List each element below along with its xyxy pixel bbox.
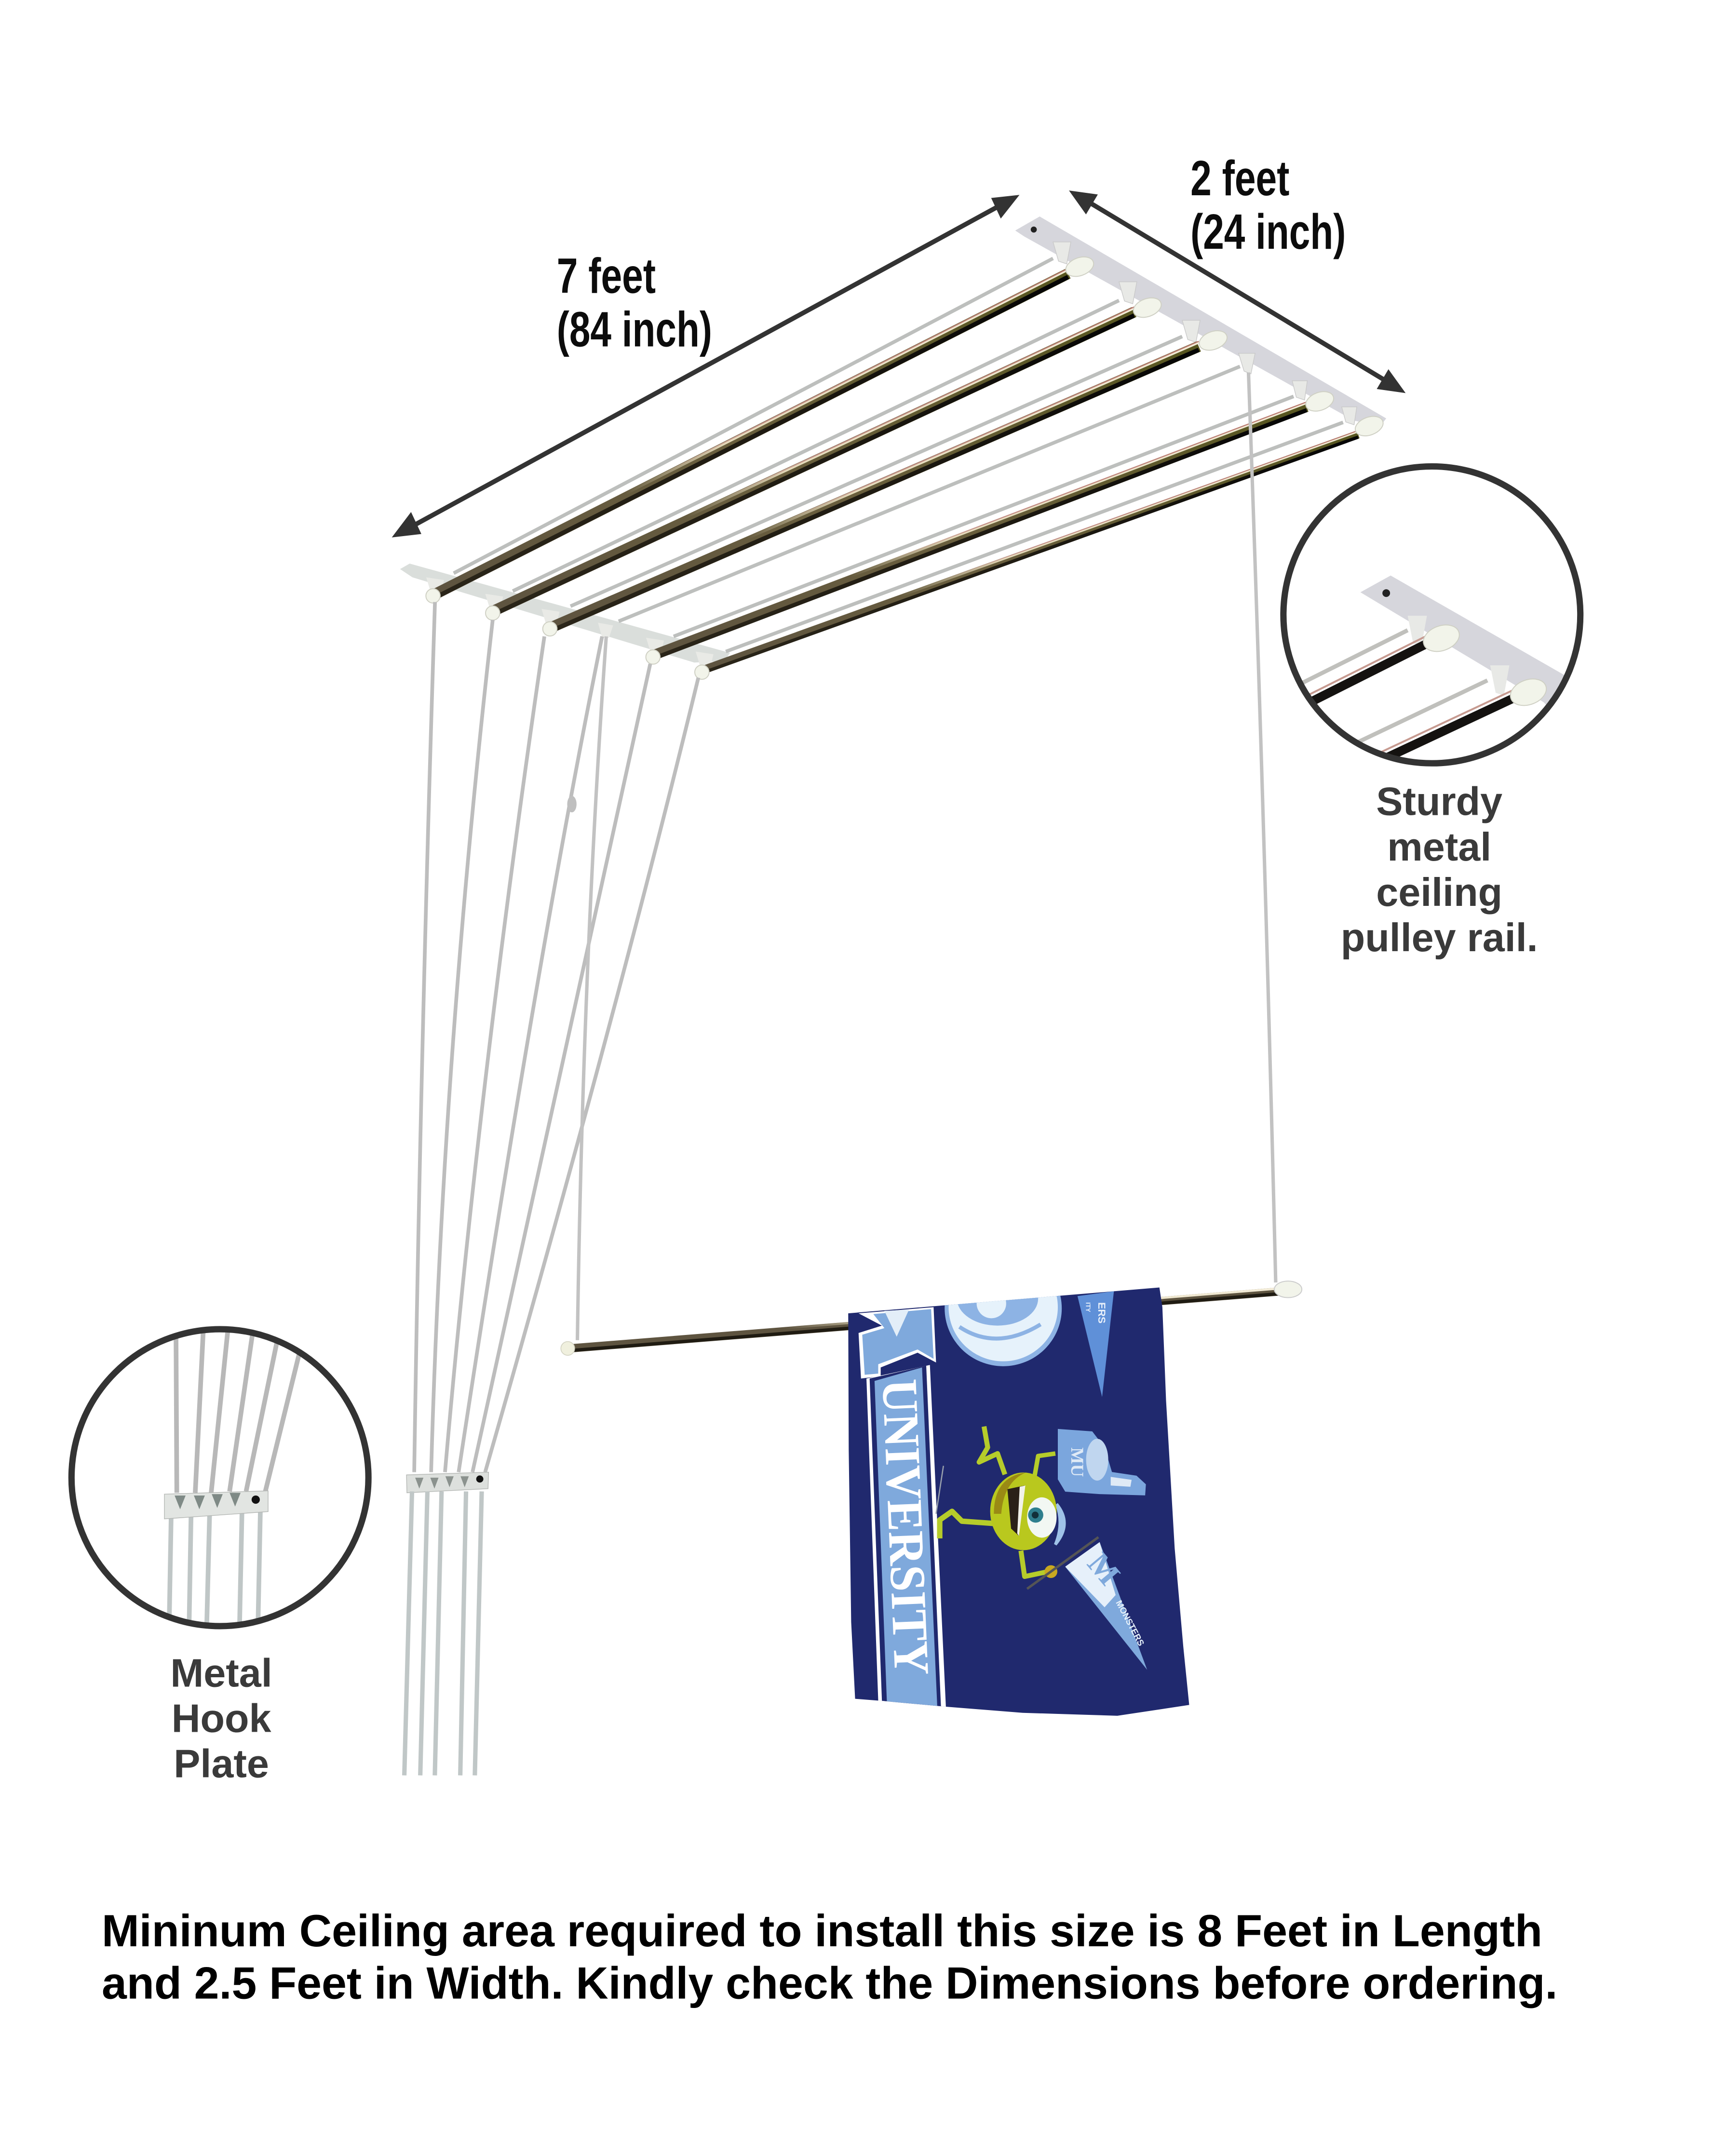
towel foam finger <box>1058 1429 1146 1496</box>
zoom circle: ceiling pulley rail <box>1283 466 1581 770</box>
drying rod 3 <box>553 341 1199 630</box>
towel text: UNIVERSITY: UNIVERSITY <box>872 1378 940 1676</box>
label: 2 feet: 2 feet <box>1190 150 1289 206</box>
towel seal <box>945 1296 1062 1366</box>
towel character <box>936 1427 1064 1578</box>
zoom circle: hook plate <box>71 1326 368 1629</box>
drying rod 6 <box>704 431 1358 672</box>
caption: hook plate: Plate <box>174 1741 269 1786</box>
drying rod 5 <box>656 402 1307 658</box>
pull cords to hook plate <box>414 602 698 1472</box>
towel pennant: top: ERS <box>1096 1302 1107 1323</box>
caption: ceiling pulley rail: pulley rail. <box>1341 915 1538 960</box>
lower rod hanging cords <box>578 373 1276 1340</box>
caption: ceiling pulley rail: ceiling <box>1376 870 1502 915</box>
towel pennant: top <box>1078 1291 1114 1397</box>
caption: hook plate: Metal <box>170 1650 272 1695</box>
dimension arrow: 2 feet <box>1069 190 1405 393</box>
bottom note: and 2.5 Feet in Width. Kindly check the Dimensions before ordering. <box>102 1958 1557 2008</box>
caption: hook plate: Hook <box>172 1696 271 1740</box>
label: 7 feet: 7 feet <box>557 248 656 303</box>
label: 2 feet: (24 inch) <box>1190 204 1346 259</box>
cords below hook plate <box>405 1491 482 1776</box>
cord stopper <box>567 796 577 812</box>
towel foam finger: MU <box>1067 1447 1087 1477</box>
towel pennant: flag <box>1027 1537 1147 1670</box>
caption: ceiling pulley rail: Sturdy <box>1376 779 1502 824</box>
towel <box>848 1251 1189 1716</box>
drying rod 2 <box>495 307 1134 614</box>
dimension arrow: 7 feet <box>392 195 1019 538</box>
ceiling pulley rail: near end <box>400 564 730 671</box>
caption: ceiling pulley rail <box>1341 779 1538 960</box>
hook plate <box>406 1472 488 1493</box>
caption: ceiling pulley rail: metal <box>1387 824 1491 869</box>
caption: hook plate <box>170 1650 272 1786</box>
drying rod 1 <box>436 269 1068 597</box>
hanging drying rod <box>561 1281 1302 1355</box>
towel stripe <box>866 1365 946 1707</box>
label: 2 feet <box>1190 150 1346 259</box>
label: 7 feet <box>557 248 712 357</box>
thin support ropes <box>454 258 1343 651</box>
bottom note: Mininum Ceiling area required to install this size is 8 Feet in Length <box>102 1905 1542 1956</box>
label: 7 feet: (84 inch) <box>557 301 712 357</box>
towel shield <box>859 1307 936 1378</box>
ceiling pulley rail: far end <box>1015 216 1386 426</box>
towel pennant: flag: MONSTERS <box>1114 1599 1147 1647</box>
bottom note <box>102 1905 1557 2008</box>
rod end caps <box>426 253 1386 679</box>
towel pennant: top: ITY <box>1085 1302 1092 1312</box>
towel pennant: flag: M <box>1080 1546 1127 1592</box>
